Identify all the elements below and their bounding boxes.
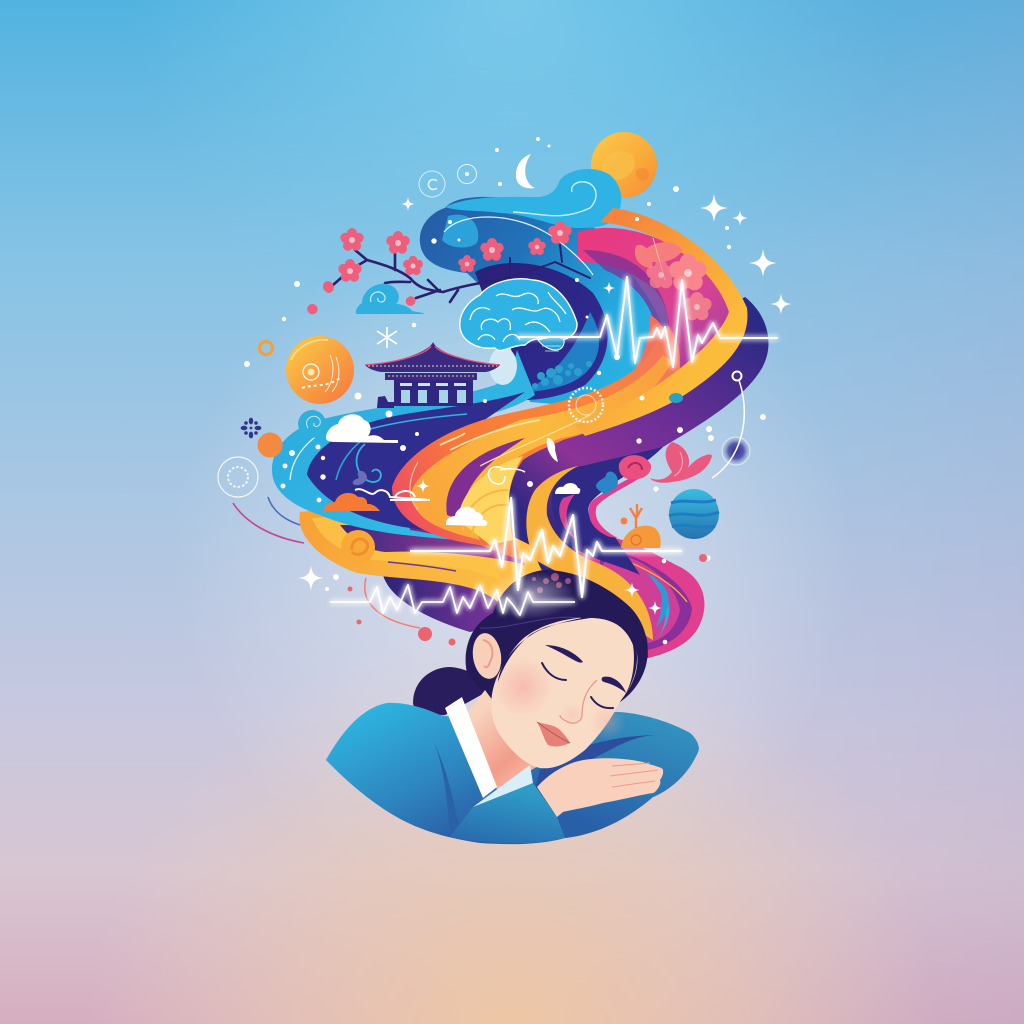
blossoms in magenta band (635, 238, 712, 320)
crescent moon (516, 154, 535, 188)
blue leaf tuft (596, 471, 618, 495)
small white cloud (555, 483, 580, 494)
white wavy cloud line (355, 489, 430, 500)
dark mass under the orange lobe (383, 560, 590, 632)
navy flower dots (241, 418, 261, 438)
pink fish tail (650, 442, 712, 483)
sun (591, 132, 657, 198)
swirl: dream ribbons (272, 169, 768, 658)
eyebrows (545, 645, 626, 693)
ecg line upper (517, 277, 778, 367)
orange lower lobe (299, 500, 560, 628)
white cloud center (446, 507, 487, 526)
closed eyes (542, 663, 613, 708)
neck (468, 690, 540, 790)
glow at head crown (485, 571, 575, 619)
navy crescent around brain (475, 263, 608, 400)
connector arc with node (712, 372, 744, 478)
dotted ring circle (218, 457, 258, 497)
hair (413, 570, 648, 720)
orange ball (258, 432, 282, 458)
orange coral shell (620, 504, 661, 548)
striped planet (669, 489, 719, 539)
ecg line lower (330, 585, 575, 615)
blue dots cluster (532, 361, 592, 389)
blue oval accent (669, 393, 683, 403)
orange cloud (323, 493, 380, 511)
spiral curl (341, 530, 375, 564)
blue upper blob (420, 197, 662, 408)
small cyan curl (298, 410, 326, 438)
front hair strand (498, 615, 637, 702)
hand (537, 758, 663, 817)
magenta ribbon (578, 228, 732, 402)
orange-pink swoop (590, 315, 666, 412)
cyan left band (272, 350, 535, 543)
nose (560, 680, 597, 723)
dark purple swoosh (583, 250, 670, 360)
outer orange gold band (575, 208, 748, 436)
navy interior (307, 392, 525, 530)
lips (537, 722, 570, 746)
small cyan cloud (356, 284, 424, 314)
ear (470, 631, 504, 681)
gold S band (526, 466, 653, 640)
coral dots and node (348, 554, 707, 646)
robe shoulders and body (326, 703, 699, 844)
white cloud upper left (326, 414, 398, 443)
cyan top wave with swirl (442, 169, 621, 275)
inner blue zone (520, 312, 599, 395)
central orange-gold ribbon (392, 208, 748, 560)
brain (460, 279, 577, 385)
ecg line middle (410, 498, 682, 597)
orange ring (260, 342, 272, 354)
sparkles and dots (244, 137, 792, 644)
pagoda (365, 342, 500, 408)
purple back ribbon (500, 297, 768, 658)
sparkle ring in ribbon (569, 388, 603, 422)
cherry blossom branch (307, 221, 590, 314)
face (491, 617, 637, 768)
sleeve (450, 783, 565, 843)
left trailing arcs (233, 497, 420, 628)
dark orb with halo (722, 437, 750, 465)
curl ring (488, 467, 525, 484)
asterisk sparkle (377, 327, 397, 348)
orange glossy orb (286, 336, 354, 404)
right collar (473, 765, 533, 818)
lower right magenta lobe (552, 447, 704, 658)
white tear accent (547, 438, 558, 462)
thin rings near moon (419, 164, 476, 197)
pink swirl rose (619, 455, 651, 479)
white collar (445, 697, 497, 798)
